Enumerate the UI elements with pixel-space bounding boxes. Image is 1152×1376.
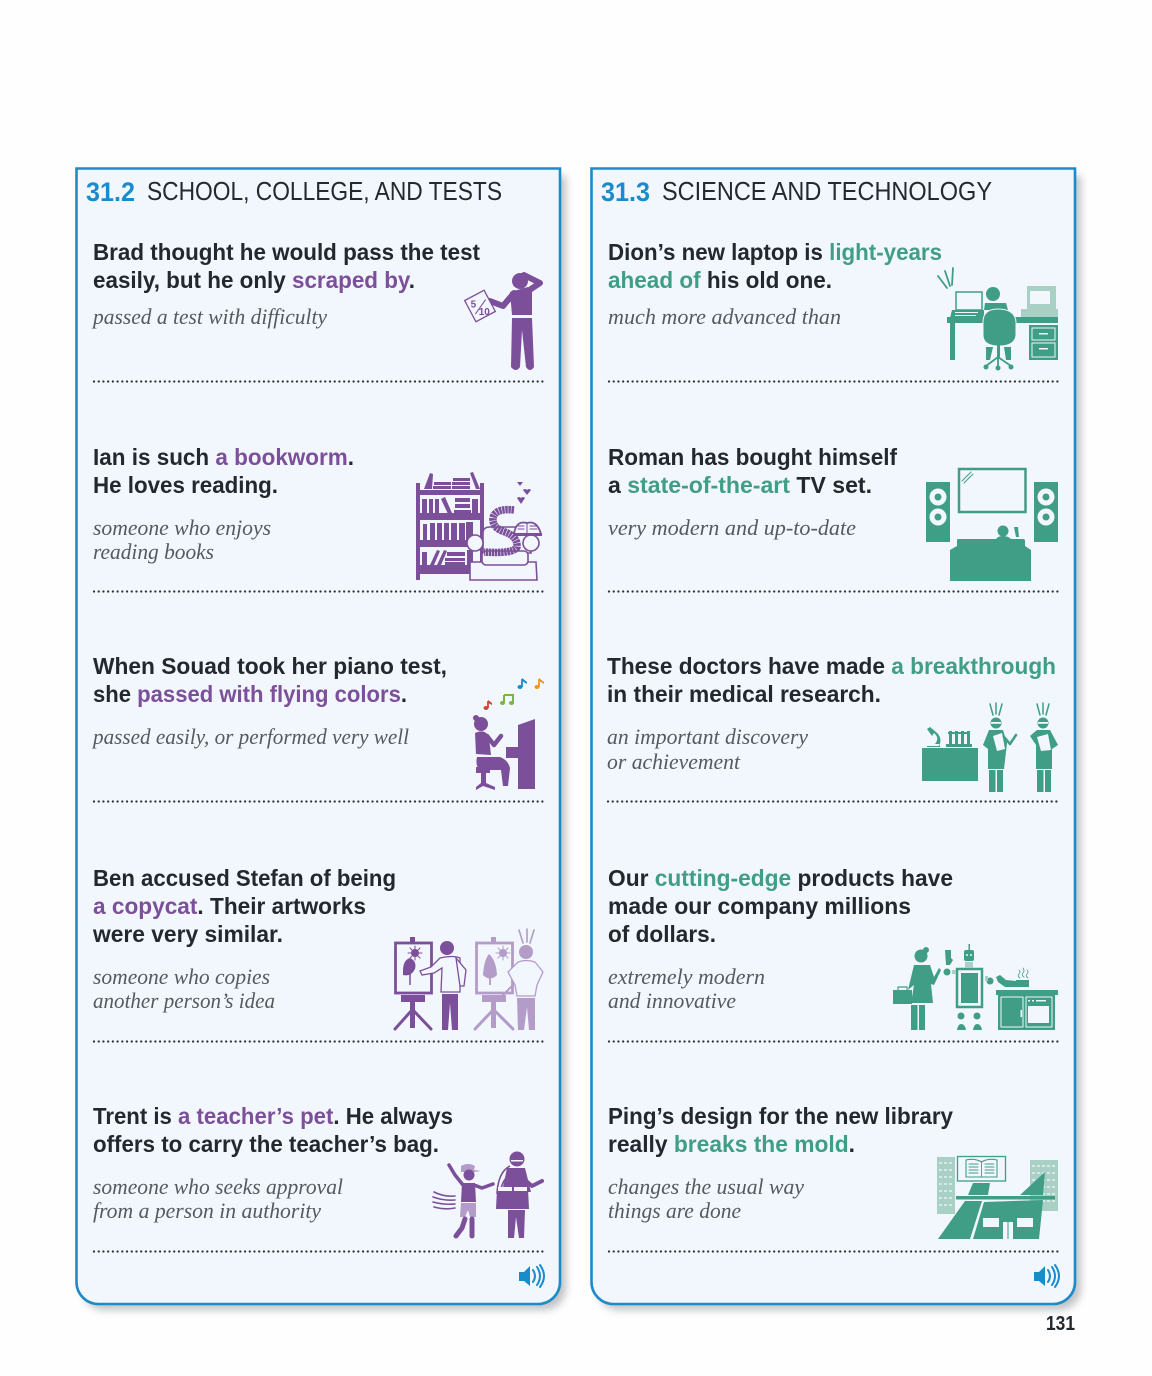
entry: a teacher's pet: Trent is a teacher’s pet. He always — [93, 1103, 453, 1129]
entry: a bookworm: reading books — [93, 539, 214, 564]
entry: a teacher's pet: from a person in authority — [93, 1198, 321, 1223]
entry: a breakthrough: an important discovery — [607, 724, 808, 749]
entry: a copycat: another person’s idea — [93, 988, 275, 1013]
entry: a teacher's pet: someone who seeks approval — [93, 1174, 343, 1199]
icon: boy and teacher carrying bag — [433, 1152, 542, 1238]
entry: scraped by: Brad thought he would pass the test — [93, 239, 480, 265]
entry: scraped by: passed a test with difficulty — [91, 304, 327, 329]
entry: cutting-edge: made our company millions — [608, 893, 911, 919]
icon: person at desk with laptop — [938, 268, 1058, 370]
entry: a copycat: were very similar. — [92, 921, 283, 947]
entry: passed with flying colors: When Souad took her piano test, — [93, 653, 447, 679]
icon: library building with open book sign — [937, 1156, 1058, 1239]
entry: breaks the mold: things are done — [608, 1198, 741, 1223]
entry: state-of-the-art: a state-of-the-art TV set. — [608, 472, 872, 498]
entry: passed with flying colors: she passed with flying colors. — [93, 681, 407, 707]
entry: a bookworm: Ian is such a bookworm. — [93, 444, 354, 470]
icon: girl playing piano with notes — [473, 678, 544, 790]
entry: cutting-edge: Our cutting-edge products have — [608, 865, 953, 891]
entry: breaks the mold — [608, 1103, 1059, 1252]
entry: cutting-edge: extremely modern — [608, 964, 765, 989]
entry: state-of-the-art: Roman has bought himself — [608, 444, 897, 470]
icon: TV, speakers and sofa — [926, 469, 1058, 581]
icon: two painters at easels — [395, 929, 543, 1030]
entry: cutting-edge: of dollars. — [608, 921, 716, 947]
entry: passed with flying colors — [91, 653, 544, 802]
icon: man with test paper — [465, 273, 540, 370]
entry: a breakthrough: These doctors have made a breakthrough — [607, 653, 1056, 679]
entry: a teacher's pet — [93, 1103, 544, 1252]
panel: school, college, and tests — [76, 168, 566, 1310]
icon: scientists with lab bench — [922, 703, 1058, 792]
entry: scraped by: easily, but he only scraped by. — [93, 267, 415, 293]
entry: a copycat: a copycat. Their artworks — [93, 893, 366, 919]
entry: a breakthrough: or achievement — [607, 749, 741, 774]
entry: a copycat — [92, 865, 544, 1042]
entry: a bookworm: someone who enjoys — [93, 515, 271, 540]
heading: 31.2: SCHOOL, COLLEGE, AND TESTS — [147, 176, 502, 206]
entry: cutting-edge — [608, 865, 1059, 1042]
icon: woman, robot and kitchen — [893, 944, 1058, 1030]
entry: breaks the mold: Ping’s design for the new library — [608, 1103, 953, 1129]
entry: a teacher's pet: offers to carry the teacher’s bag. — [93, 1131, 439, 1157]
entry: light-years ahead of: much more advanced than — [608, 304, 841, 329]
entry: light-years ahead of: Dion’s new laptop is light-years — [608, 239, 942, 265]
entry: scraped by — [91, 239, 544, 382]
heading: 31.3: 31.3 — [601, 177, 650, 207]
page number: 131 — [1046, 1313, 1075, 1335]
entry: a breakthrough — [607, 653, 1058, 802]
entry: state-of-the-art: very modern and up-to-date — [608, 515, 856, 540]
entry: a bookworm — [93, 444, 544, 592]
entry: a copycat: Ben accused Stefan of being — [93, 865, 396, 891]
entry: a breakthrough: in their medical research. — [607, 681, 881, 707]
icon: bookworm on armchair by bookcase — [416, 472, 542, 580]
icon: speaker — [519, 1265, 544, 1287]
entry: a copycat: someone who copies — [93, 964, 270, 989]
icon: man with test paper: 5 — [471, 299, 477, 310]
icon: man with test paper: 10 — [479, 307, 490, 318]
panel: science and technology — [592, 168, 1081, 1310]
entry: passed with flying colors: passed easily, or performed very well — [91, 724, 409, 749]
entry: breaks the mold: really breaks the mold. — [608, 1131, 855, 1157]
entry: cutting-edge: and innovative — [608, 988, 736, 1013]
entry: state-of-the-art — [608, 444, 1059, 592]
entry: light-years ahead of: ahead of his old one. — [608, 267, 832, 293]
heading: 31.3: SCIENCE AND TECHNOLOGY — [662, 176, 992, 206]
entry: light-years ahead of — [608, 239, 1059, 382]
icon: speaker — [1034, 1265, 1059, 1287]
entry: a bookworm: He loves reading. — [93, 472, 278, 498]
heading: 31.2: 31.2 — [86, 177, 135, 207]
entry: breaks the mold: changes the usual way — [608, 1174, 804, 1199]
